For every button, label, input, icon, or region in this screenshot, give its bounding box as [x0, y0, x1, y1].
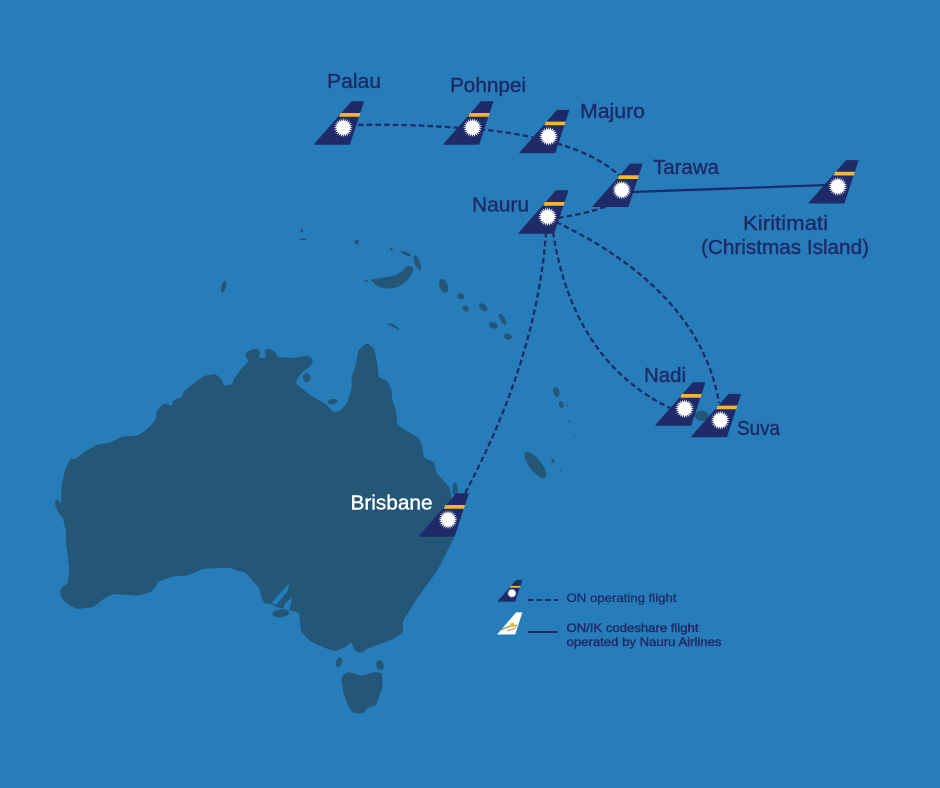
route: Nauru to Tarawa, dashed	[558, 205, 610, 218]
tail: Majuro	[520, 110, 569, 153]
label: Nauru: Nauru	[472, 194, 529, 216]
route: Tarawa to Kiritimati, solid	[632, 185, 827, 192]
label: Suva: Suva	[737, 418, 781, 440]
legend text: ON operating flight: ON operating flight	[566, 591, 677, 605]
label: Pohnpei: Pohnpei	[450, 75, 526, 97]
routes	[358, 125, 827, 497]
map: Pacific islands north	[220, 229, 513, 341]
landmass: mainland Australia and Tasmania	[61, 343, 455, 713]
gulf: Gulf St Vincent	[283, 597, 292, 611]
map: Pacific islands east	[521, 386, 709, 481]
label: Kiritimati (Christmas Island)	[701, 213, 869, 259]
label: Majuro: Majuro	[580, 101, 645, 123]
gulf: Spencer Gulf	[272, 582, 290, 605]
route: Palau to Tarawa, dashed	[358, 125, 622, 178]
legend text: codeshare flight: operated by Nauru Airlines	[566, 635, 722, 649]
label: Kiritimati (Christmas Island): Kiritimati	[743, 213, 828, 235]
tail: Pohnpei	[444, 102, 493, 144]
legend line: solid	[528, 631, 558, 633]
label: Nadi: Nadi	[644, 365, 686, 387]
legend text: codeshare flight	[566, 621, 722, 649]
legend icon: codeshare tail	[498, 612, 522, 634]
route: Nauru to Suva, dashed	[556, 222, 719, 403]
tail: Palau	[314, 102, 364, 144]
route: Nauru to Nadi, dashed	[553, 232, 672, 409]
tail: Nadi	[656, 383, 705, 425]
legend icon: Nauru Airlines tail	[498, 580, 522, 602]
tail: Nauru	[519, 191, 568, 233]
label: Brisbane: Brisbane	[350, 492, 432, 514]
tail: Brisbane	[419, 494, 468, 536]
route: Nauru to Brisbane, dashed	[463, 232, 546, 497]
label: Kiritimati (Christmas Island): (Christmas Island)	[701, 237, 869, 259]
legend	[498, 580, 722, 649]
legend text: codeshare flight: ON/IK codeshare flight	[566, 621, 699, 635]
label: Tarawa: Tarawa	[653, 157, 720, 179]
tail: Kiritimati	[809, 160, 858, 203]
tail: Suva	[691, 394, 741, 437]
label: Palau: Palau	[327, 71, 381, 93]
islands around Australia	[53, 373, 458, 671]
legend line: dashed	[528, 599, 558, 601]
tail: Tarawa	[593, 164, 642, 207]
map: Australia	[53, 343, 458, 713]
